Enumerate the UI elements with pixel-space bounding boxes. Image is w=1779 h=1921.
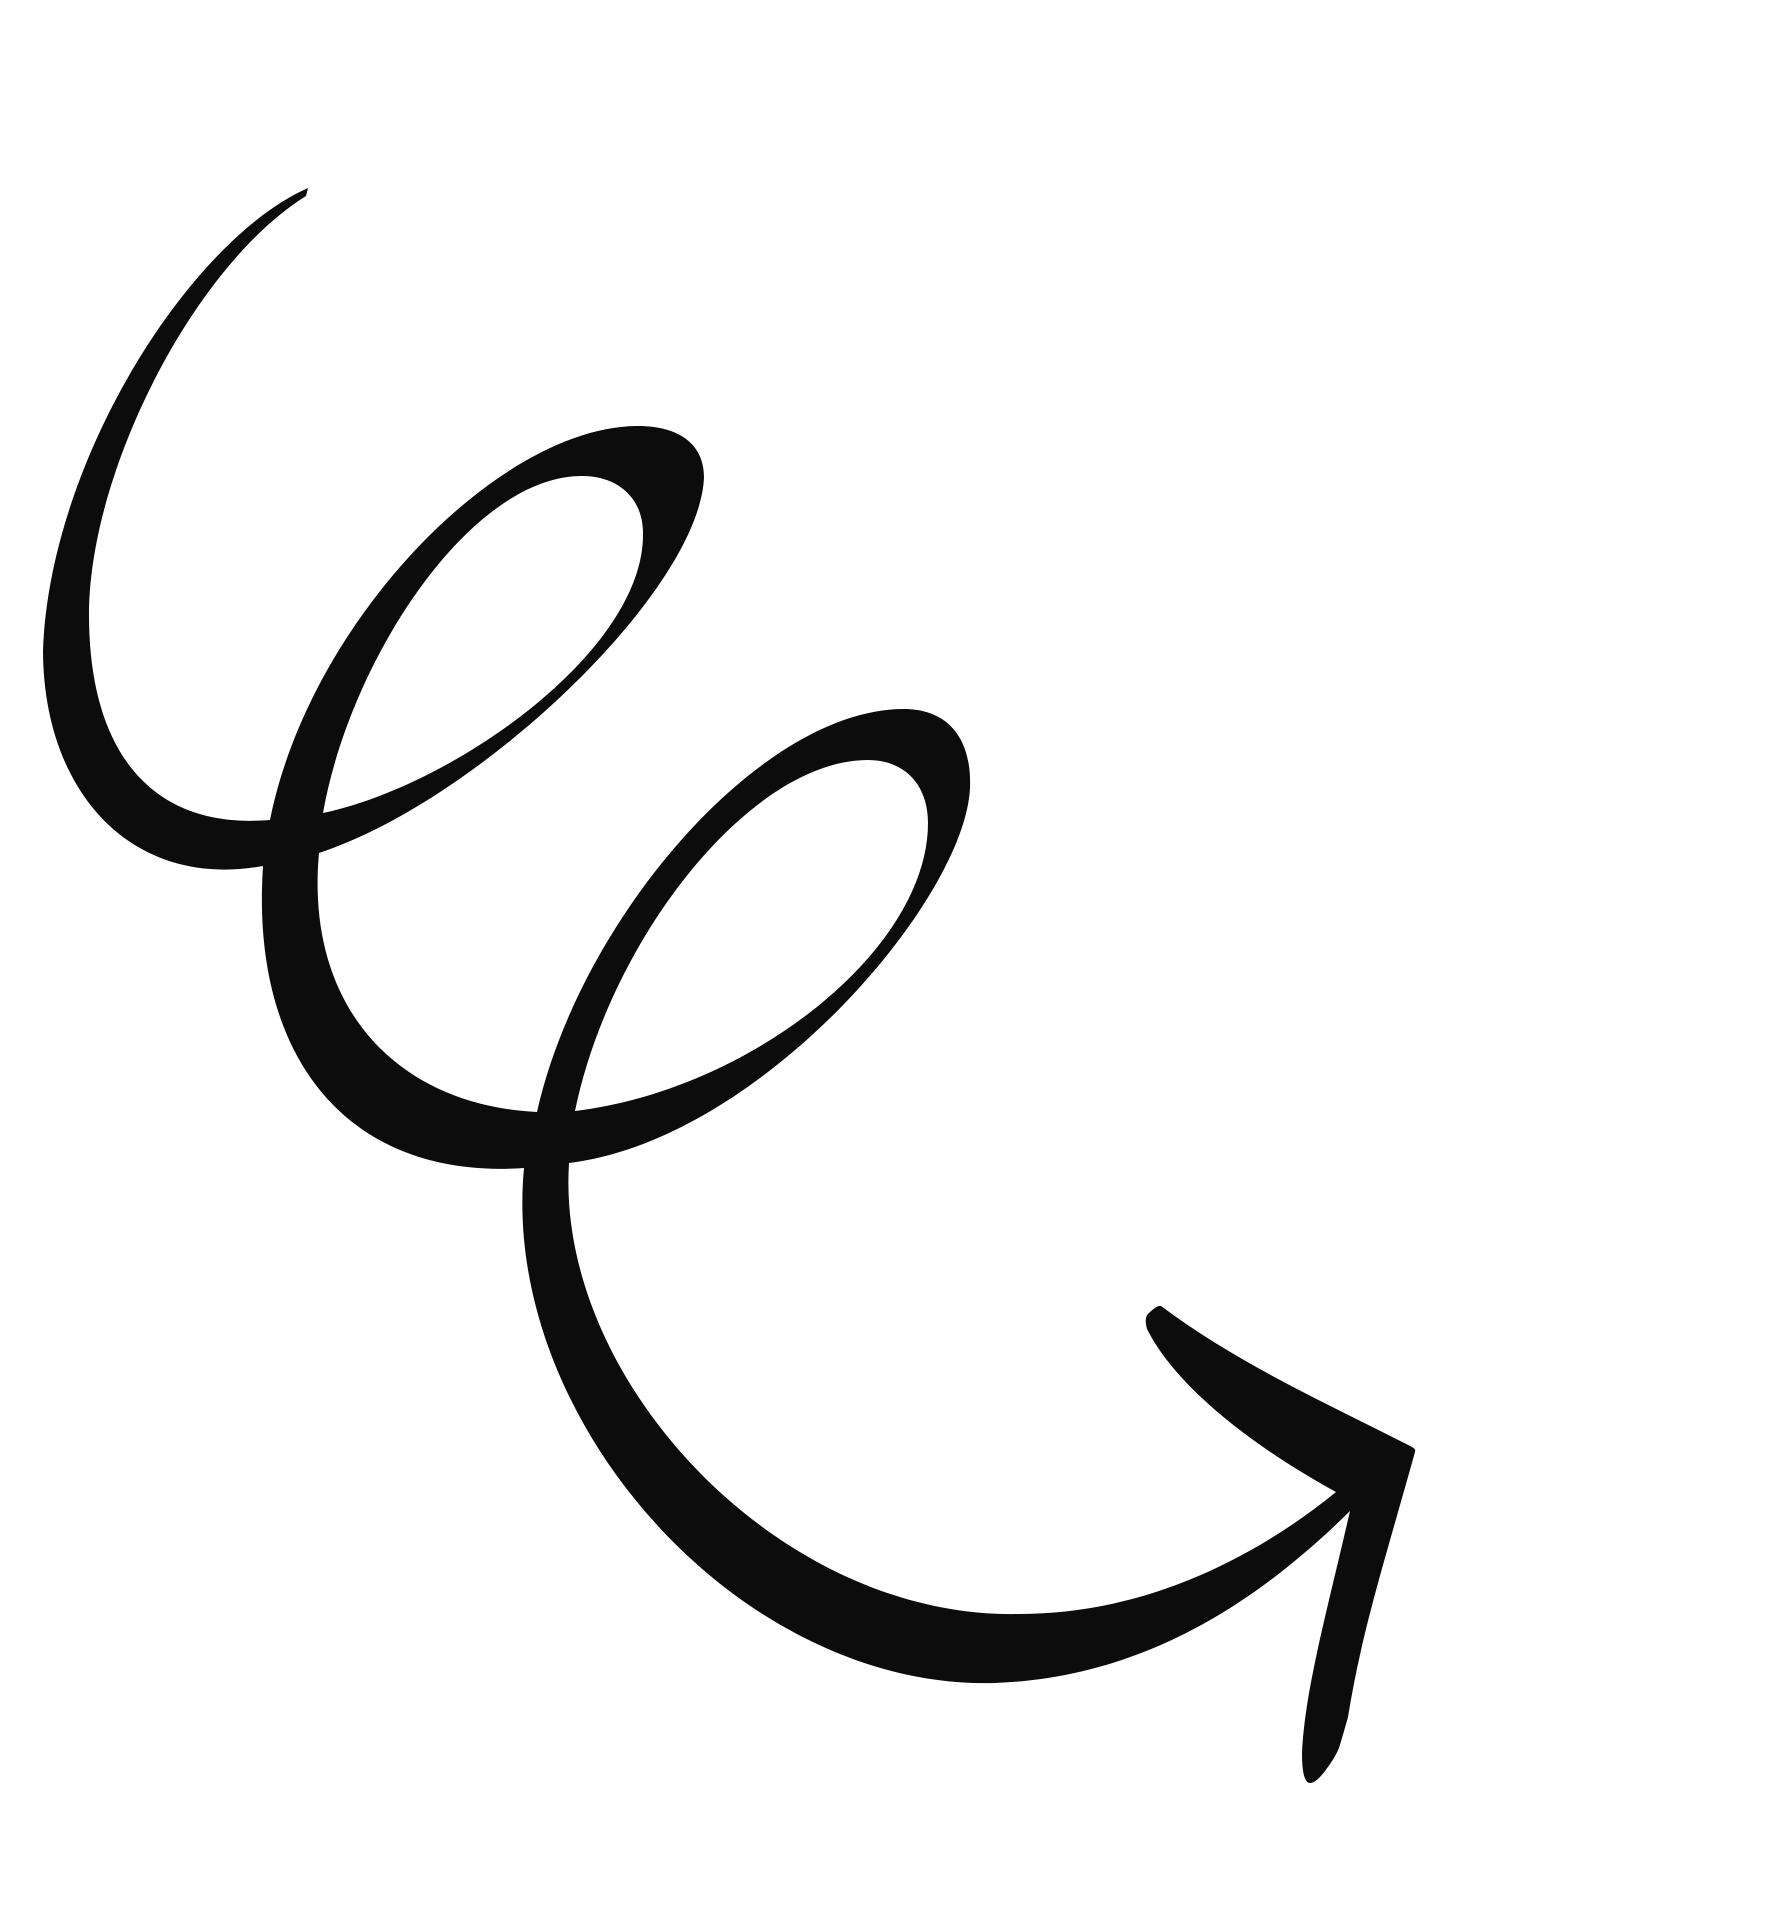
arrow: looping hand-drawn spiral arrow bbox=[43, 188, 1415, 1783]
